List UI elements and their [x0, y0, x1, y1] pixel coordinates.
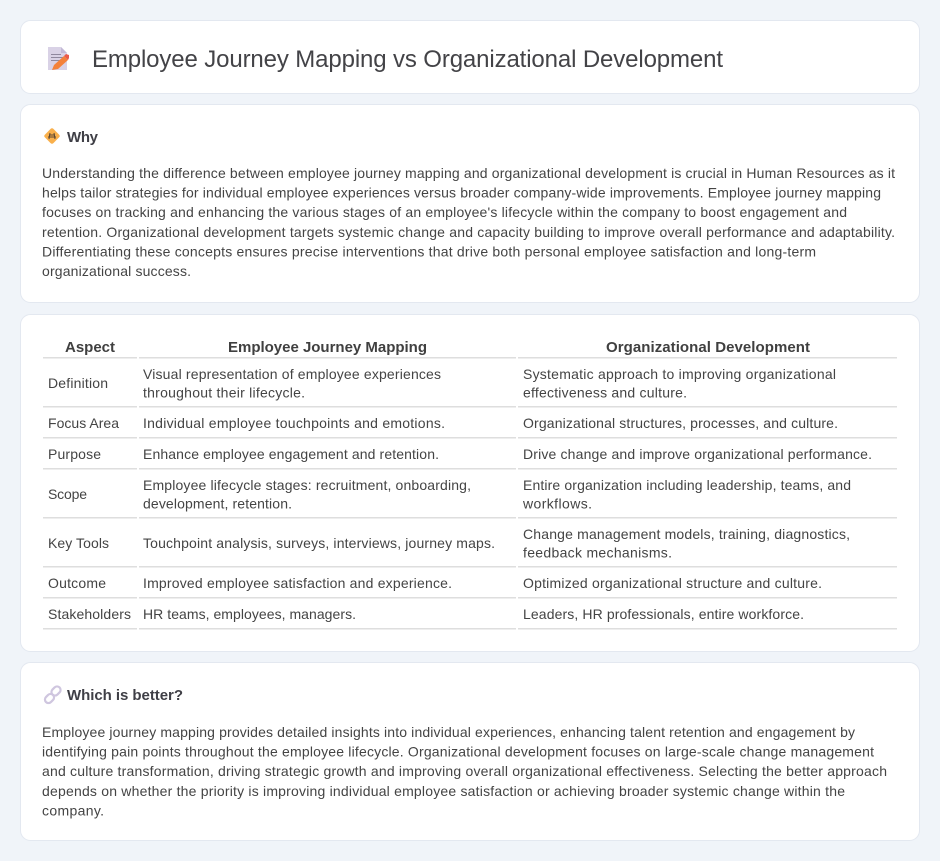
- table header row: [43, 339, 897, 358]
- icon: memo with pencil: [48, 47, 69, 70]
- text block: which paragraph: identifying pain points throughout the employee lifecycle. Organizational development focuses on large-scale change management: [42, 744, 874, 760]
- row: key tools: feedback mechanisms.: [523, 545, 672, 561]
- panel: title card: [20, 20, 920, 94]
- row: focus area: Individual employee touchpoints and emotions.: [143, 415, 445, 431]
- row: definition: throughout their lifecycle.: [143, 385, 305, 401]
- row: scope: Entire organization including leadership, teams, and: [523, 477, 851, 493]
- row: focus area: Organizational structures, processes, and culture.: [523, 415, 838, 431]
- row: outcome: Improved employee satisfaction and experience.: [143, 575, 452, 591]
- panel: comparison table: [20, 314, 920, 652]
- row: scope: [43, 477, 897, 518]
- row: scope: development, retention.: [143, 496, 292, 512]
- row: purpose: Drive change and improve organizational performance.: [523, 446, 872, 462]
- text block: why paragraph: focuses on tracking and enhancing the various stages of an employee's lifecycle within the company to boost engagement and: [42, 204, 847, 220]
- text block: which paragraph: Employee journey mapping provides detailed insights into individual experiences, enhancing talent retention and engagement by: [42, 724, 855, 740]
- row: definition: Definition: [48, 375, 108, 391]
- row: key tools: Change management models, training, diagnostics,: [523, 526, 850, 542]
- row: stakeholders: Stakeholders: [48, 606, 131, 622]
- row: stakeholders: [43, 606, 897, 630]
- heading: which is better: Which is better?: [67, 687, 183, 704]
- row: scope: Scope: [48, 486, 87, 502]
- text block: why paragraph: Understanding the difference between employee journey mapping and organizational development is crucial in Human Resources as it: [42, 165, 895, 181]
- text block: which paragraph: [42, 724, 887, 818]
- heading: why: Why: [67, 129, 99, 146]
- text block: why paragraph: [42, 165, 895, 279]
- icon: warning diamond: [44, 128, 60, 144]
- table header row: Employee Journey Mapping: [228, 339, 427, 356]
- panel: which is better: [20, 662, 920, 840]
- row: definition: Visual representation of employee experiences: [143, 366, 441, 382]
- row: focus area: [43, 415, 897, 438]
- row: outcome: Optimized organizational structure and culture.: [523, 575, 822, 591]
- row: scope: Employee lifecycle stages: recruitment, onboarding,: [143, 477, 471, 493]
- text block: why paragraph: retention. Organizational development targets systemic change and capacity building to improve overall performance and adaptability.: [42, 224, 895, 240]
- row: outcome: [43, 575, 897, 598]
- row: stakeholders: Leaders, HR professionals, entire workforce.: [523, 606, 804, 622]
- row: key tools: Touchpoint analysis, surveys, interviews, journey maps.: [143, 535, 495, 551]
- text block: why paragraph: organizational success.: [42, 263, 191, 279]
- table header row: Aspect: [65, 339, 115, 356]
- table header row: Organizational Development: [606, 339, 810, 356]
- row: purpose: [43, 446, 897, 470]
- text block: which paragraph: and culture transformation, driving strategic growth and improving overall organizational effectiveness. Selecting the better approach: [42, 763, 887, 779]
- text block: why paragraph: helps tailor strategies for individual employee experiences versus broader company-wide improvements. Employee journey mapping: [42, 185, 881, 201]
- row: focus area: Focus Area: [48, 415, 119, 431]
- text block: which paragraph: company.: [42, 802, 104, 818]
- row: key tools: Key Tools: [48, 535, 109, 551]
- title: Employee Journey Mapping vs Organizational Development: [92, 46, 723, 73]
- icon: link: [43, 685, 62, 705]
- row: purpose: Purpose: [48, 446, 101, 462]
- row: outcome: Outcome: [48, 575, 106, 591]
- row: stakeholders: HR teams, employees, managers.: [143, 606, 356, 622]
- row: definition: effectiveness and culture.: [523, 385, 687, 401]
- row: purpose: Enhance employee engagement and retention.: [143, 446, 439, 462]
- row: scope: workflows.: [522, 496, 592, 512]
- panel: why: [20, 104, 920, 302]
- text block: which paragraph: depends on whether the priority is improving individual employee satisfaction or achieving broader systemic change within the: [42, 783, 845, 799]
- row: key tools: [43, 526, 897, 568]
- row: definition: Systematic approach to improving organizational: [523, 366, 836, 382]
- row: definition: [43, 366, 897, 408]
- text block: why paragraph: Differentiating these concepts ensures precise interventions that drive both personal employee satisfaction and long-term: [42, 243, 816, 259]
